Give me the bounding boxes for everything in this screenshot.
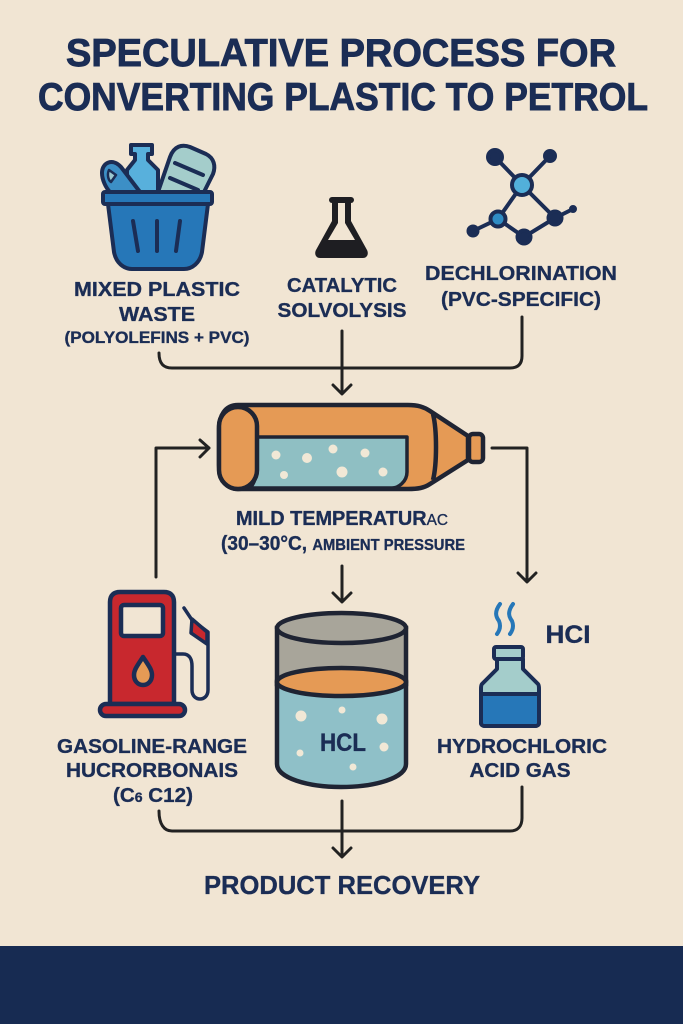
icon: fuel pump (100, 592, 208, 716)
label: catalytic solvolysis: CATALYTIC (287, 274, 397, 297)
icon: reactor vessel (219, 405, 483, 489)
label: hydrochloric acid gas: HYDROCHLORIC (437, 735, 607, 758)
label: gasoline-range hydrocarbons: GASOLINE-RANGE (57, 735, 247, 758)
icon: molecule (468, 150, 575, 244)
arrow: inputs merge into reactor (159, 317, 522, 394)
label: HCl gas symbol: HCI (546, 621, 590, 649)
label: dechlorination: (PVC-SPECIFIC) (441, 288, 601, 311)
icon: plastic waste basket (102, 145, 214, 269)
label: gasoline-range hydrocarbons (57, 735, 247, 807)
icon: separation tank (277, 613, 406, 787)
label: mixed plastic waste: (POLYOLEFINS + PVC) (64, 329, 250, 347)
label: dechlorination: DECHLORINATION (425, 262, 617, 285)
arrow: reactor to tank (333, 566, 351, 602)
footer band (0, 946, 683, 1024)
label: mixed plastic waste: WASTE (119, 303, 195, 326)
label: hydrochloric acid gas: ACID GAS (470, 759, 570, 782)
label: HCL on tank: HCL (320, 729, 366, 757)
label: dechlorination (425, 262, 617, 311)
arrow: recycle into reactor (156, 440, 209, 577)
label: mixed plastic waste: MIXED PLASTIC (74, 278, 240, 301)
label: mixed plastic waste (64, 278, 250, 347)
label: mild temperature: (30–30°C, AMBIENT PRESSURE (221, 533, 465, 555)
label: gasoline-range hydrocarbons: (C6 C12) (113, 784, 193, 807)
label: mild temperature (221, 508, 465, 555)
label: mild temperature: MILD TEMPERATURAC (236, 508, 448, 530)
label: catalytic solvolysis (278, 274, 406, 322)
arrow: reactor to HCl (492, 448, 536, 582)
arrow: products merge to recovery (159, 787, 522, 857)
icon: flask (315, 197, 368, 258)
title (38, 32, 648, 119)
label: catalytic solvolysis: SOLVOLYSIS (278, 299, 406, 322)
label: gasoline-range hydrocarbons: HUCRORBONAIS (66, 759, 238, 782)
title: SPECULATIVE PROCESS FOR (66, 32, 616, 75)
label: hydrochloric acid gas (437, 735, 607, 782)
icon: HCl gas bottle (481, 604, 539, 726)
label: product recovery: PRODUCT RECOVERY (204, 870, 480, 900)
